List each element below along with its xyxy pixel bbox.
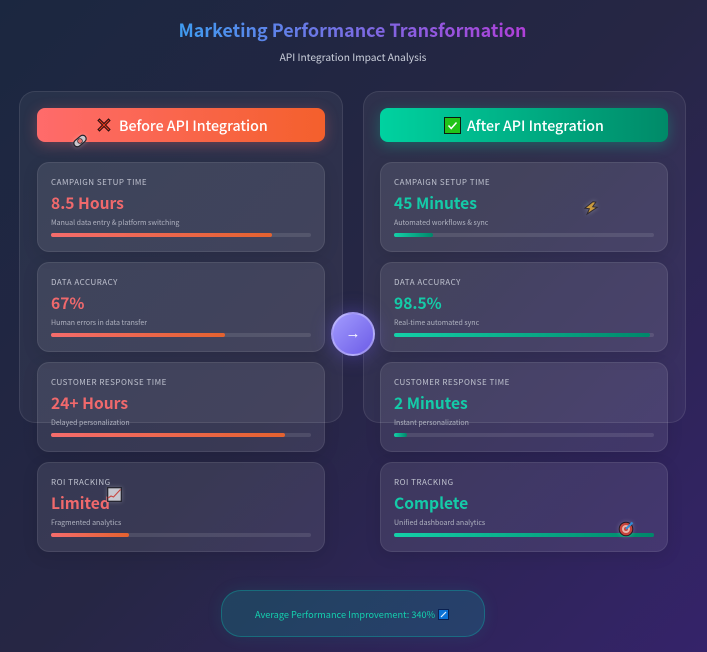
card: before roi: ROI TRACKING	[51, 477, 111, 488]
arrow button: →	[346, 325, 360, 342]
icon: lightning	[584, 200, 598, 216]
card: after setup time: 45 Minutes	[394, 192, 477, 214]
card: after setup time: CAMPAIGN SETUP TIME	[394, 177, 490, 188]
panel: before	[19, 91, 343, 423]
icon: link	[72, 134, 88, 149]
card: before accuracy	[37, 262, 325, 352]
card: before response time: 24+ Hours	[51, 392, 128, 414]
card: before setup time: CAMPAIGN SETUP TIME	[51, 177, 147, 188]
card: before setup time	[37, 162, 325, 252]
icon: chart	[105, 485, 124, 504]
card: after accuracy	[380, 262, 668, 352]
arrow button	[331, 312, 375, 356]
card: before roi: Fragmented analytics	[51, 518, 121, 528]
subtitle: API Integration Impact Analysis	[280, 49, 426, 64]
card: after setup time: Automated workflows & sync	[394, 218, 488, 228]
card: before response time	[37, 362, 325, 452]
heading: before: Before API Integration	[119, 116, 268, 136]
card: before setup time: 8.5 Hours	[51, 192, 124, 214]
callout: average improvement: Average Performance Improvement: 340%	[255, 607, 435, 621]
card: before roi	[37, 462, 325, 552]
card: after setup time	[380, 162, 668, 252]
panel: after	[363, 91, 686, 423]
card: after response time: Instant personalization	[394, 418, 469, 428]
card: after accuracy: 98.5%	[394, 292, 442, 314]
card: before accuracy: 67%	[51, 292, 84, 314]
card: before roi: Limited	[51, 492, 110, 514]
callout: average improvement	[221, 590, 485, 637]
heading: before	[37, 108, 325, 142]
card: after roi	[380, 462, 668, 552]
card: after response time: 2 Minutes	[394, 392, 468, 414]
card: after roi: Unified dashboard analytics	[394, 518, 485, 528]
card: after accuracy: Real-time automated sync	[394, 318, 479, 328]
card: before response time: CUSTOMER RESPONSE TIME	[51, 377, 167, 388]
card: before accuracy: Human errors in data transfer	[51, 318, 147, 328]
heading: after	[380, 108, 668, 142]
card: after response time	[380, 362, 668, 452]
card: after accuracy: DATA ACCURACY	[394, 277, 461, 288]
icon: target	[617, 520, 635, 538]
card: after response time: CUSTOMER RESPONSE TIME	[394, 377, 510, 388]
card: after roi: ROI TRACKING	[394, 477, 454, 488]
heading: after: After API Integration	[467, 116, 604, 136]
card: before accuracy: DATA ACCURACY	[51, 277, 118, 288]
title: Marketing Performance Transformation	[178, 17, 527, 43]
card: after roi: Complete	[394, 492, 468, 514]
card: before response time: Delayed personalization	[51, 418, 130, 428]
card: before setup time: Manual data entry & platform switching	[51, 218, 179, 228]
